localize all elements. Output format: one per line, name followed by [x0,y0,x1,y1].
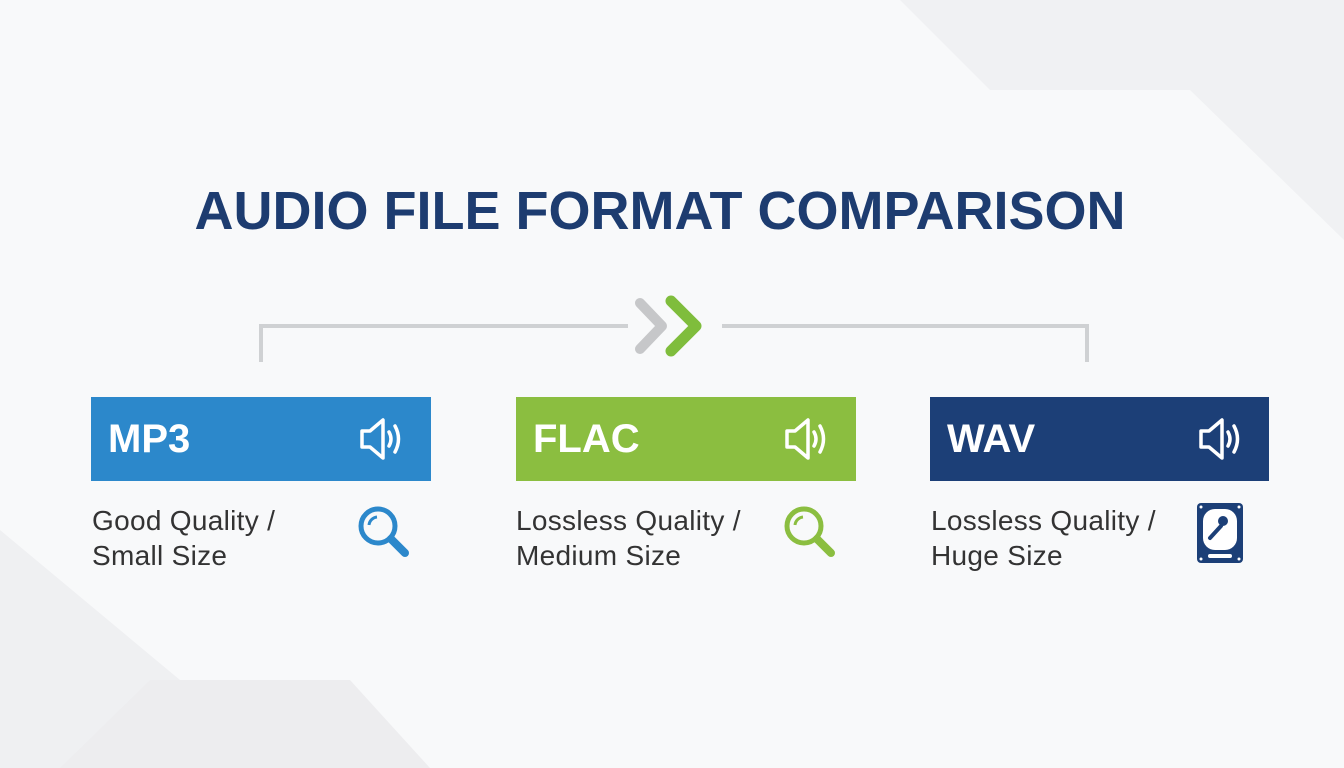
panel: MP3: MP3 [108,417,190,461]
text: MP3 description [92,505,275,571]
panel: WAV: WAV [947,417,1035,461]
text: FLAC description: Lossless Quality / [516,505,741,536]
text: WAV description: Huge Size [931,540,1063,571]
text: MP3 description: Small Size [92,540,227,571]
panel: WAV [930,397,1269,481]
panel: MP3 [91,397,431,481]
icon: speaker [1199,418,1240,460]
text: MP3 description: Good Quality / [92,505,275,536]
panel: FLAC [516,397,856,481]
icon: magnifier blue [358,506,409,557]
text: FLAC description: Medium Size [516,540,681,571]
icon: speaker [360,418,400,460]
text: WAV description [931,505,1156,571]
text: FLAC description [516,505,741,571]
icon: speaker [785,418,826,460]
icon: magnifier green [784,506,835,557]
panel: FLAC: FLAC [533,417,640,461]
connector arrow [259,296,1089,362]
text: WAV description: Lossless Quality / [931,505,1156,536]
icon: hard drive [1197,503,1243,563]
title: AUDIO FILE FORMAT COMPARISON [195,181,1125,241]
